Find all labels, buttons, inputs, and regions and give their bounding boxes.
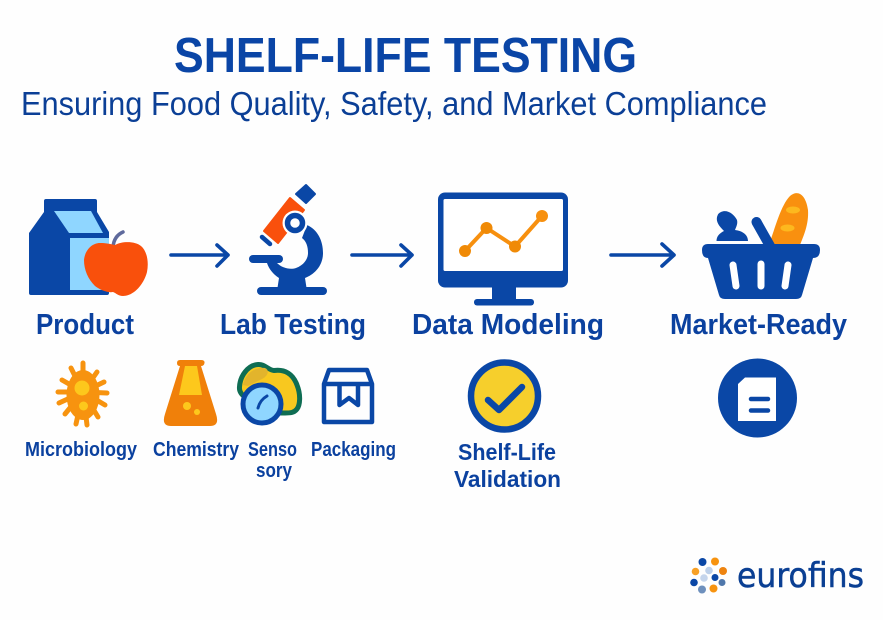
label: Sensory: sory	[256, 460, 293, 482]
label: Data Modeling: Data Modeling	[412, 309, 604, 341]
label: Sensory: Senso	[248, 439, 297, 461]
label: Sensory	[248, 439, 297, 482]
label: Shelf-Life Validation: Shelf-Life	[458, 439, 556, 465]
icon: shopping basket with bread	[702, 193, 820, 299]
label: Product: Product	[36, 309, 134, 341]
arrow: product to lab testing	[171, 245, 228, 266]
label: Shelf-Life Validation: Validation	[454, 466, 561, 492]
label: Packaging: Packaging	[311, 439, 396, 461]
label: Chemistry: Chemistry	[153, 439, 240, 461]
icon: monitor with line chart	[438, 192, 568, 306]
label: Lab Testing: Lab Testing	[220, 309, 366, 341]
logo: eurofins	[690, 556, 864, 596]
logo: eurofins: eurofins	[737, 556, 864, 596]
icon: microscope	[253, 185, 323, 291]
icon: validation check badge	[471, 362, 538, 430]
subtitle: Ensuring Food Quality, Safety, and Market Compliance	[21, 85, 767, 122]
icon: milk carton and apple	[29, 199, 148, 296]
label: Microbiology: Microbiology	[25, 439, 138, 461]
title: SHELF-LIFE TESTING	[174, 29, 637, 83]
arrow: data modeling to market-ready	[611, 244, 674, 266]
icon: market document badge	[718, 358, 797, 438]
icon: microbe	[58, 363, 107, 425]
icon: chemistry flask	[164, 360, 217, 426]
icon: sensory	[239, 364, 300, 423]
arrow: lab testing to data modeling	[352, 245, 412, 266]
label: Shelf-Life Validation	[454, 439, 561, 492]
label: Market-Ready: Market-Ready	[670, 309, 847, 341]
icon: packaging box	[324, 370, 372, 422]
